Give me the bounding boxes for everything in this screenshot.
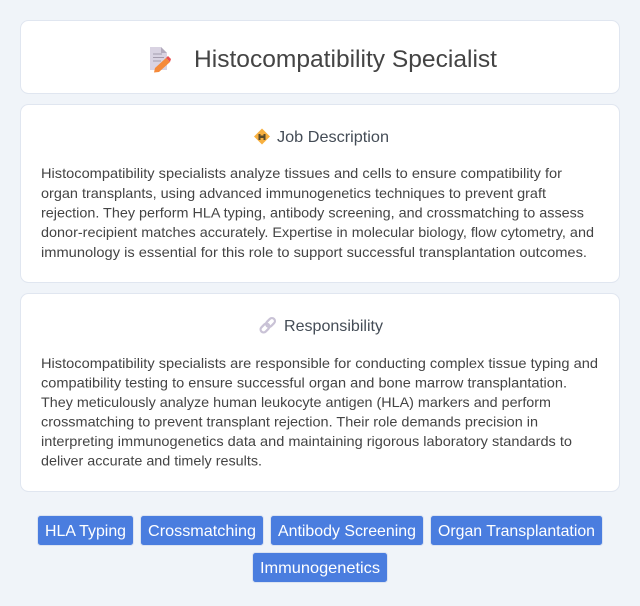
text block: responsibility: They meticulously analyze human leukocyte antigen (HLA) markers and perform: [41, 394, 551, 410]
tag: Immunogenetics: Immunogenetics: [260, 560, 380, 577]
panel: job description: [20, 104, 620, 282]
text block: job description: immunology is essential for this role to support successful transplantation outcomes.: [41, 244, 587, 260]
tags: [38, 516, 602, 582]
heading: job description: Job Description: [277, 129, 389, 146]
icon: link: [259, 317, 276, 334]
tag: Crossmatching: [140, 516, 264, 546]
tag: HLA Typing: [38, 516, 134, 546]
tag: HLA Typing: HLA Typing: [45, 523, 126, 540]
text block: responsibility: Histocompatibility specialists are responsible for conducting complex tissue typing and: [41, 355, 598, 371]
panel: responsibility: [20, 294, 620, 492]
text block: responsibility: [41, 355, 598, 468]
tag: Organ Transplantation: [430, 516, 602, 546]
tag: Crossmatching: Crossmatching: [148, 523, 256, 540]
text block: job description: donor-recipient matches accurately. Expertise in molecular biology, flow cytometry, and: [41, 224, 594, 240]
heading: responsibility: Responsibility: [284, 318, 383, 335]
text block: job description: organ transplants, using advanced immunogenetics techniques to prevent graft: [41, 185, 546, 201]
title: Histocompatibility Specialist: [194, 46, 497, 73]
tag: Antibody Screening: Antibody Screening: [278, 523, 416, 540]
text block: responsibility: interpreting immunogenetics data and maintaining rigorous laboratory standards to: [41, 433, 572, 449]
text block: job description: Histocompatibility specialists analyze tissues and cells to ensure compatibility for: [41, 165, 562, 181]
text block: responsibility: crossmatching to prevent transplant rejection. Their role demands precision in: [41, 414, 538, 430]
text block: job description: [41, 165, 594, 260]
tag: Organ Transplantation: Organ Transplantation: [438, 523, 595, 540]
text block: job description: rejection. They perform HLA typing, antibody screening, and crossmatching to assess: [41, 204, 584, 220]
text block: responsibility: deliver accurate and timely results.: [41, 452, 262, 468]
tag: Antibody Screening: [270, 516, 424, 546]
panel: title card: [20, 20, 620, 94]
text block: responsibility: compatibility testing to ensure successful organ and bone marrow transplantation.: [41, 374, 567, 390]
icon: orange diamond: [254, 128, 270, 144]
icon: document with pencil: [150, 47, 171, 72]
tag: Immunogenetics: [252, 552, 388, 582]
